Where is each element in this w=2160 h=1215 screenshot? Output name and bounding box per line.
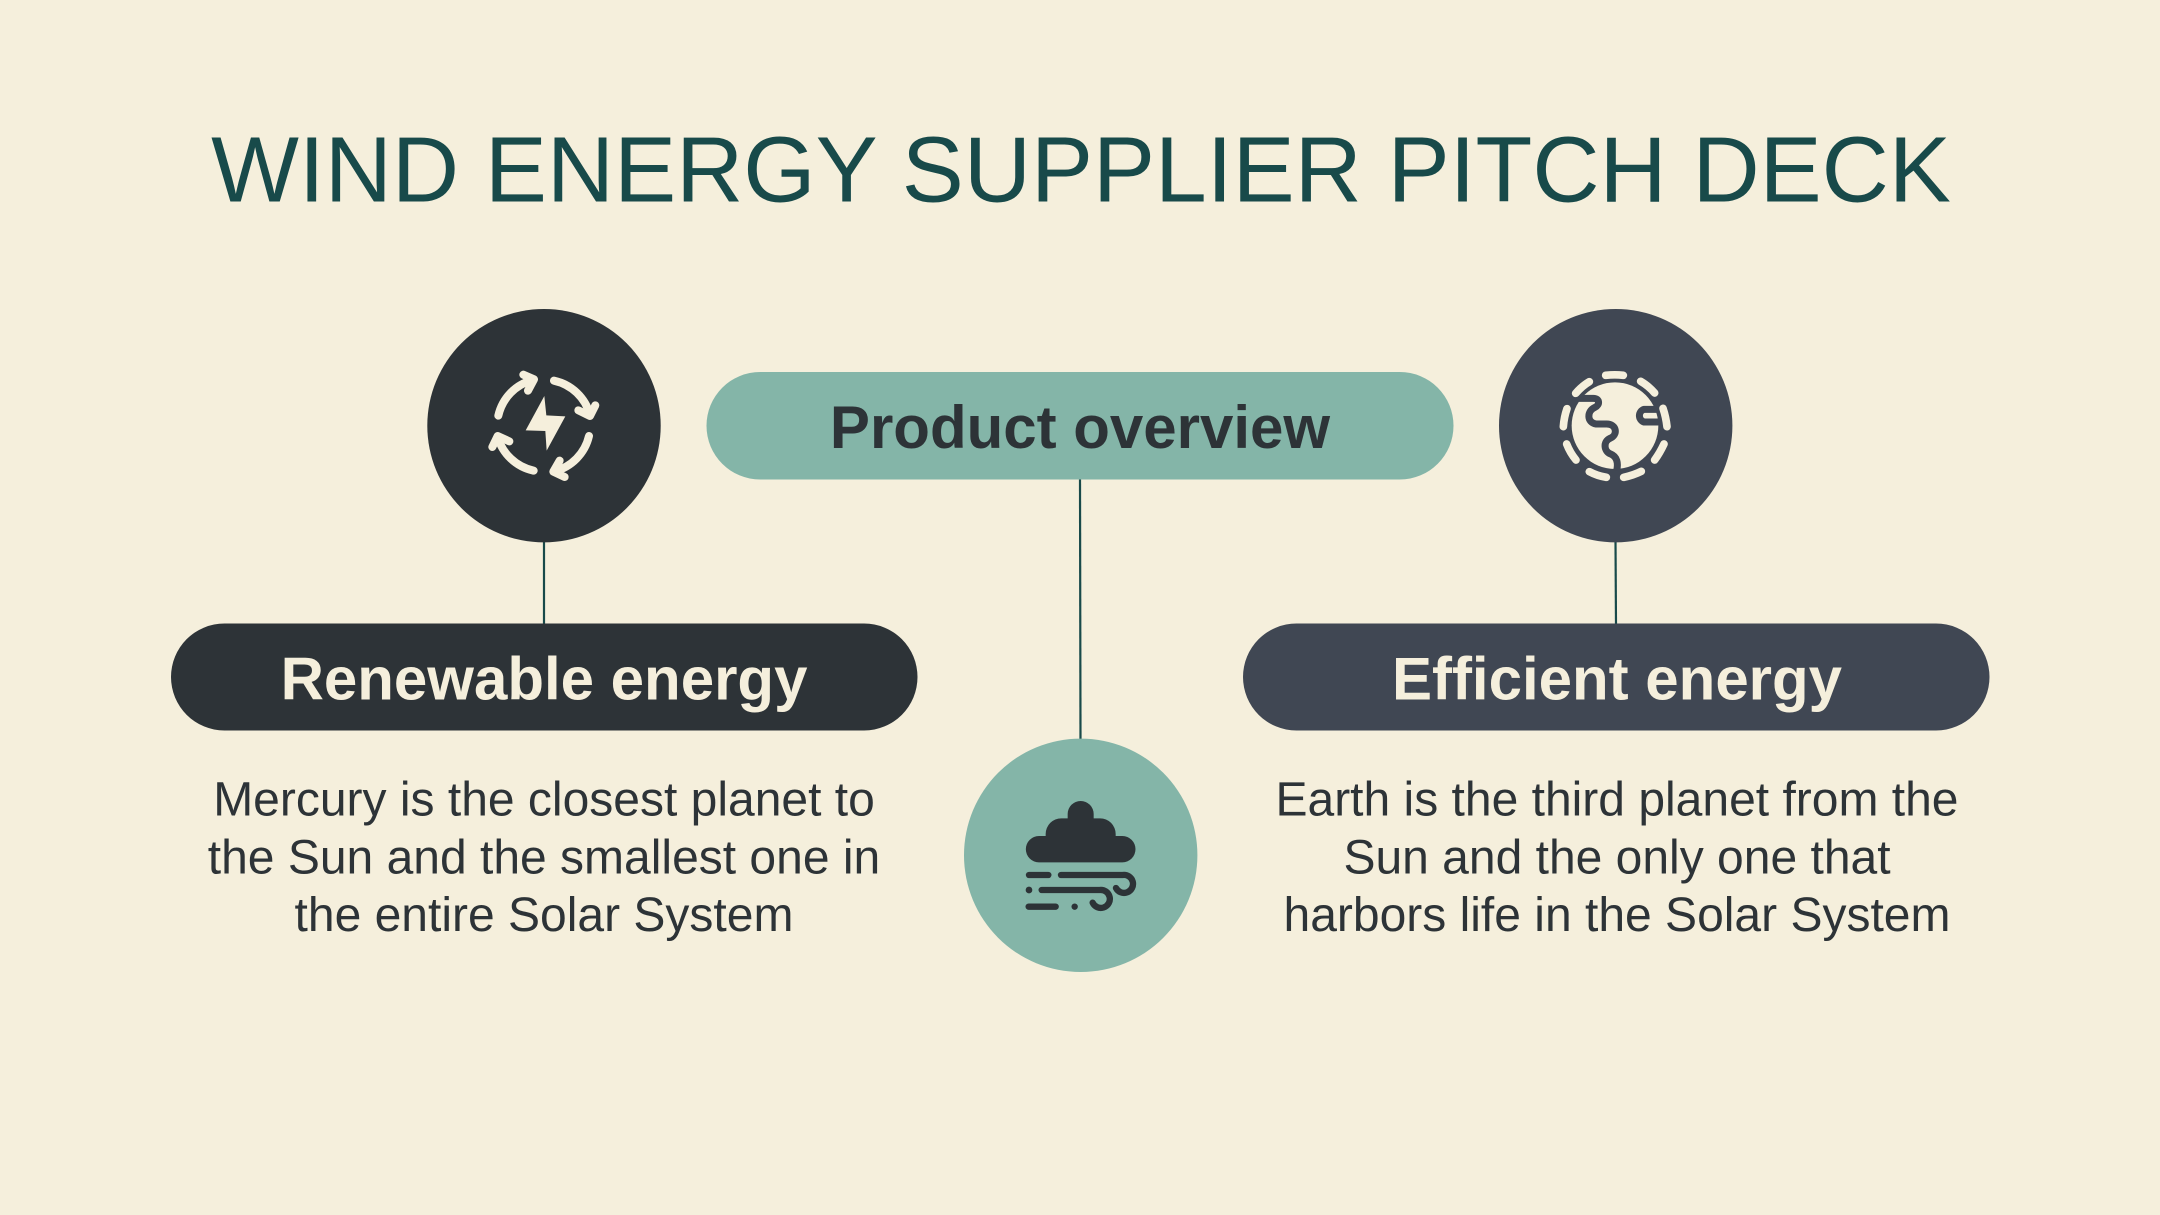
- text block: renewable energy description: Mercury is the closest planet to: [213, 774, 875, 826]
- text block: renewable energy description: [208, 774, 880, 942]
- heading: renewable energy: Renewable energy: [281, 646, 808, 712]
- text block: renewable energy description: the entire Solar System: [295, 889, 793, 942]
- text block: efficient energy description: [1275, 774, 1959, 942]
- circle icon: wind: [964, 739, 1197, 972]
- text block: efficient energy description: Sun and the only one that: [1343, 831, 1891, 884]
- pill: efficient energy: [1243, 624, 1990, 730]
- icon: cloud with wind lines: [1026, 801, 1135, 910]
- text block: renewable energy description: the Sun and the smallest one in: [208, 831, 880, 884]
- circle icon: efficient energy: [1499, 309, 1732, 542]
- connector: efficient circle to pill: [1614, 540, 1617, 626]
- icon: energy cycle with lightning bolt: [492, 375, 595, 477]
- heading: product overview: Product overview: [830, 394, 1330, 461]
- icon: globe with dashed ring: [1563, 375, 1667, 477]
- pill: renewable energy: [171, 624, 918, 730]
- circle icon: renewable energy: [427, 309, 661, 542]
- heading: efficient energy: Efficient energy: [1392, 646, 1843, 712]
- text block: efficient energy description: harbors life in the Solar System: [1284, 889, 1950, 942]
- pill: product overview: [706, 372, 1454, 480]
- connector: product overview to wind circle: [1079, 478, 1082, 742]
- text block: efficient energy description: Earth is the third planet from the: [1275, 774, 1959, 826]
- connector: renewable circle to pill: [543, 540, 545, 626]
- title: WIND ENERGY SUPPLIER PITCH DECK: [211, 118, 1951, 222]
